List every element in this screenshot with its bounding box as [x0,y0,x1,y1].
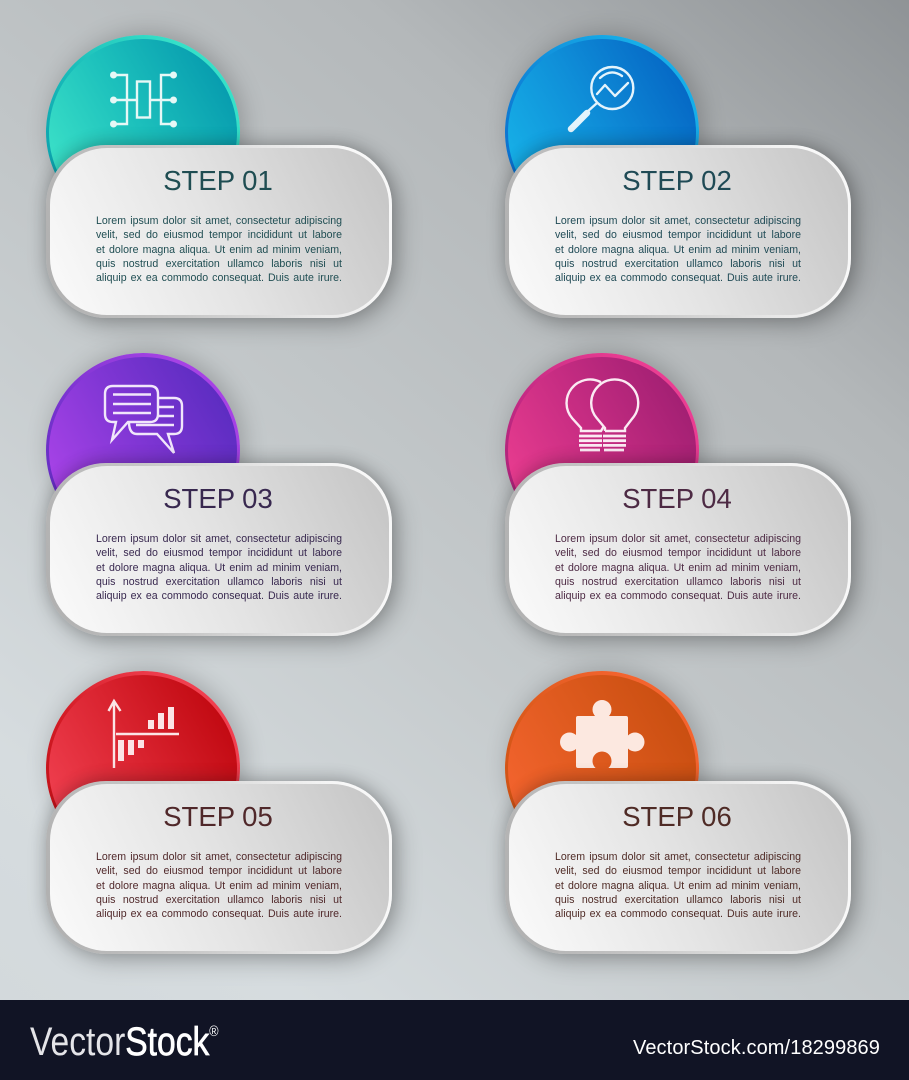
card: step 03 [46,463,392,636]
panel: step 04 [496,342,868,654]
body text [555,533,801,602]
panel: step 03 [36,342,410,655]
purple circle [46,353,240,547]
heading: STEP 03 [163,483,273,514]
heading: STEP 01 [163,165,273,196]
magenta circle [505,353,699,547]
logo wordmark: VectorStock® [30,1020,219,1064]
body text: et dolore magna aliqua. Ut enim ad minim veniam, [96,244,342,256]
card: step 06 [505,781,851,954]
body text [96,215,342,284]
body text: quis nostrud exercitation ullamco laboris nisi ut [555,894,801,906]
body text: aliquip ex ea commodo consequat. Duis aute irure. [96,272,342,284]
panel: step 01 [36,24,410,336]
body text: aliquip ex ea commodo consequat. Duis aute irure. [555,908,801,920]
body text: aliquip ex ea commodo consequat. Duis aute irure. [96,590,342,602]
body text: Lorem ipsum dolor sit amet, consectetur adipiscing [555,215,801,227]
body text: quis nostrud exercitation ullamco laboris nisi ut [96,258,342,270]
icon: bar chart with arrow axis [108,698,179,768]
blue circle [505,35,699,229]
panel: step 06 [494,660,868,973]
body text: velit, sed do eiusmod tempor incididunt ut labore [555,229,801,241]
icon: speech bubbles [104,384,184,454]
heading: STEP 05 [163,801,273,832]
image id: VectorStock.com/18299869 [633,1037,880,1059]
body text: Lorem ipsum dolor sit amet, consectetur adipiscing [96,215,342,227]
card: step 01 [46,145,392,318]
card: step 05 [46,781,392,954]
body text: quis nostrud exercitation ullamco laboris nisi ut [96,894,342,906]
heading: STEP 02 [622,165,732,196]
body text: Lorem ipsum dolor sit amet, consectetur adipiscing [555,851,801,863]
body text [555,215,801,284]
heading: STEP 06 [622,801,732,832]
body text [96,533,342,602]
body text [96,851,342,920]
body text: velit, sed do eiusmod tempor incididunt ut labore [96,229,342,241]
body text: velit, sed do eiusmod tempor incididunt ut labore [96,547,342,559]
card: step 04 [505,463,851,636]
body text: velit, sed do eiusmod tempor incididunt ut labore [555,547,801,559]
teal circle [46,35,240,229]
body text: quis nostrud exercitation ullamco laboris nisi ut [555,258,801,270]
body text: Lorem ipsum dolor sit amet, consectetur adipiscing [96,533,342,545]
body text: et dolore magna aliqua. Ut enim ad minim veniam, [555,244,801,256]
body text: et dolore magna aliqua. Ut enim ad minim veniam, [555,562,801,574]
body text: quis nostrud exercitation ullamco laboris nisi ut [555,576,801,588]
orange circle [505,671,699,865]
panel: step 02 [496,24,868,336]
body text: velit, sed do eiusmod tempor incididunt ut labore [96,865,342,877]
card: step 02 [505,145,851,318]
icon: circuit [110,72,177,128]
body text: aliquip ex ea commodo consequat. Duis aute irure. [555,590,801,602]
icon: puzzle piece [560,700,644,768]
body text: et dolore magna aliqua. Ut enim ad minim veniam, [96,562,342,574]
body text: Lorem ipsum dolor sit amet, consectetur adipiscing [555,533,801,545]
body text: aliquip ex ea commodo consequat. Duis aute irure. [555,272,801,284]
body text: et dolore magna aliqua. Ut enim ad minim veniam, [555,880,801,892]
body text: quis nostrud exercitation ullamco laboris nisi ut [96,576,342,588]
panel: step 05 [36,658,410,973]
body text: Lorem ipsum dolor sit amet, consectetur adipiscing [96,851,342,863]
body text: et dolore magna aliqua. Ut enim ad minim veniam, [96,880,342,892]
icon: magnifier with trend line [568,66,634,132]
red circle [46,671,240,865]
body text: aliquip ex ea commodo consequat. Duis aute irure. [96,908,342,920]
icon: light bulbs [565,378,640,452]
heading: STEP 04 [622,483,732,514]
body text [555,851,801,920]
body text: velit, sed do eiusmod tempor incididunt ut labore [555,865,801,877]
footer banner [0,1000,909,1080]
